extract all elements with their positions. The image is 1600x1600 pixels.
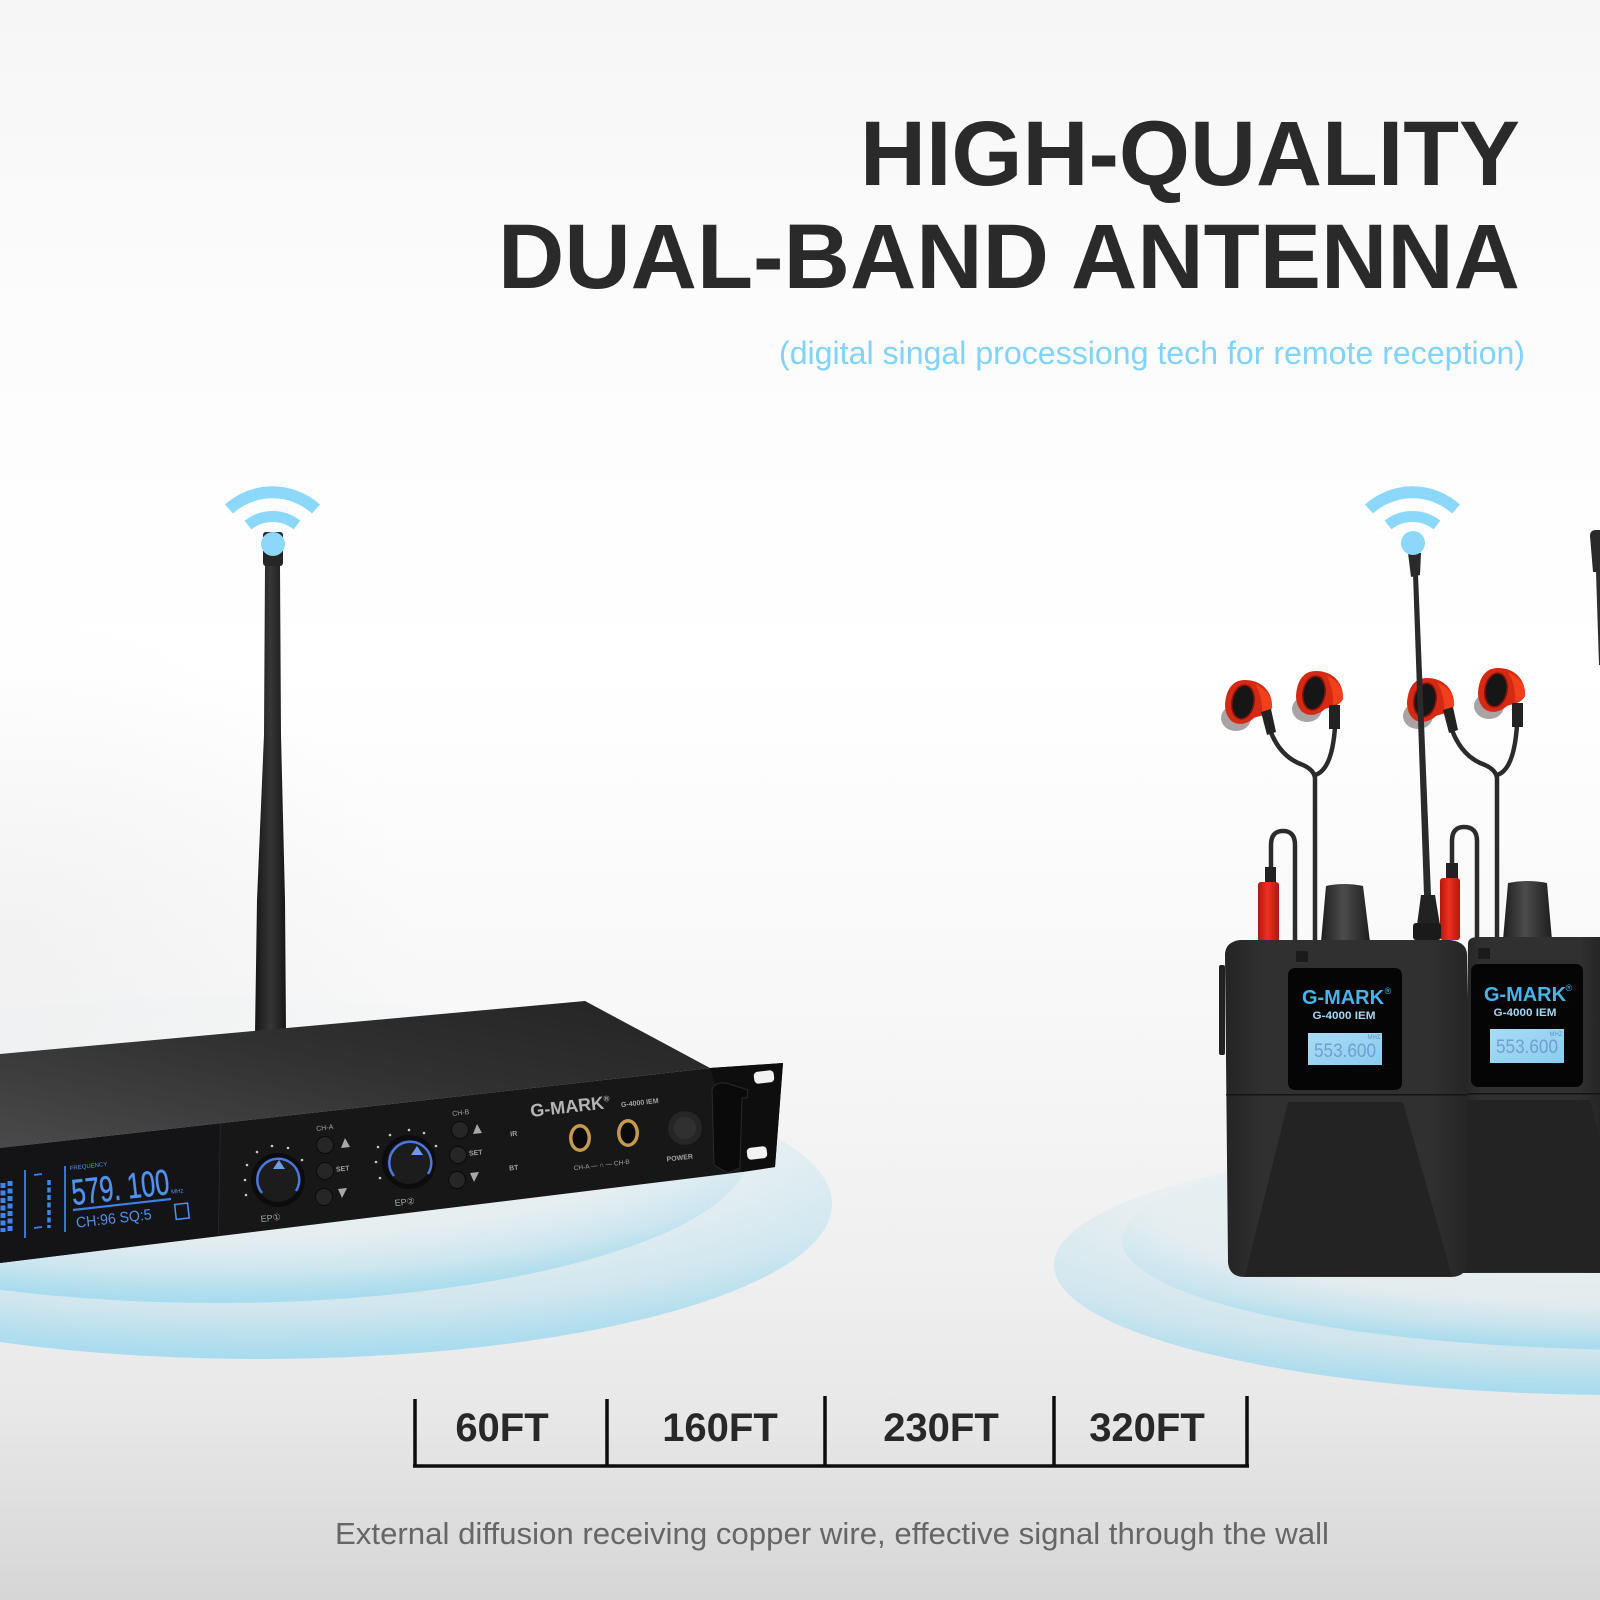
earbud 3 — [1403, 678, 1458, 733]
bodypack 2: G-4000 IEM — [1494, 1007, 1556, 1019]
bodypack 1 — [1219, 940, 1467, 1277]
signal waves: left — [0, 997, 832, 1359]
bodypack 1: ® — [1385, 986, 1392, 996]
power button — [668, 1111, 702, 1145]
level meter — [3, 1180, 49, 1232]
subtitle: (digital singal processiong tech for remote reception) — [779, 335, 1525, 371]
EP knob 2 — [375, 1129, 437, 1189]
distance scale — [413, 1396, 1249, 1466]
ear holes — [746, 1070, 775, 1160]
G-MARK logo: ® — [603, 1094, 610, 1104]
earbud 2 — [1292, 671, 1343, 729]
bodypack 1: MHZ — [1368, 1035, 1381, 1041]
title: DUAL-BAND ANTENNA — [498, 206, 1520, 308]
front panel labels: SET — [469, 1149, 484, 1158]
bodypack receivers — [1219, 863, 1600, 1277]
frequency readout: MHz — [171, 1188, 184, 1196]
rack ear — [710, 1063, 783, 1172]
title — [498, 103, 1520, 308]
distance labels: 320FT — [1089, 1406, 1205, 1450]
EP knob 1 — [244, 1145, 305, 1207]
front panel labels: EP② — [394, 1196, 415, 1208]
front panel labels — [260, 1098, 693, 1224]
front panel labels: BT — [509, 1164, 520, 1173]
in-ear monitors and cables — [1221, 668, 1525, 940]
front panel labels: POWER — [666, 1154, 693, 1163]
front panel labels: CH-A — [316, 1124, 334, 1133]
bodypack 2 — [1462, 937, 1600, 1273]
bodypack 2: 553.600 — [1496, 1037, 1558, 1058]
front panel labels: EP① — [260, 1212, 281, 1224]
bodypack 2: ® — [1566, 983, 1573, 993]
screen 1 — [1288, 968, 1402, 1090]
frequency readout: FREQUENCY — [70, 1162, 108, 1172]
frequency readout: 579. 100 — [69, 1161, 171, 1213]
front panel labels: IR — [510, 1131, 518, 1138]
distance labels: 60FT — [455, 1406, 549, 1450]
bodypack 2: G-MARK — [1484, 984, 1567, 1006]
screen 2 — [1471, 964, 1583, 1087]
wifi icon: right — [1369, 492, 1456, 555]
display lines — [25, 1166, 171, 1238]
cables — [1270, 725, 1517, 940]
lower trapezoid facet — [1245, 1102, 1452, 1276]
distance labels: 230FT — [883, 1406, 999, 1450]
scale lines — [413, 1396, 1249, 1466]
bodypack 1: 553.600 — [1314, 1041, 1376, 1062]
headphone jacks — [569, 1119, 639, 1152]
earbud 1 — [1221, 680, 1276, 735]
front panel labels: SET — [336, 1165, 351, 1174]
button arrows — [338, 1124, 482, 1198]
wifi icon: left — [229, 492, 316, 556]
volume knobs — [1321, 881, 1552, 942]
frequency readout: CH:96 SQ:5 — [75, 1206, 153, 1232]
handle — [712, 1083, 748, 1173]
G-MARK logo: G-MARK — [529, 1093, 605, 1121]
front panel labels: CH-B — [452, 1109, 470, 1118]
red plugs — [1258, 863, 1460, 942]
signal waves: right — [1054, 1130, 1600, 1395]
bodypack 1: G-MARK — [1302, 987, 1385, 1009]
distance labels: 160FT — [662, 1406, 778, 1450]
earbud 4 — [1474, 668, 1525, 727]
display divider — [218, 1124, 220, 1235]
bodypack 2: MHZ — [1550, 1032, 1563, 1038]
caption: External diffusion receiving copper wire, effective signal through the wall — [335, 1516, 1329, 1551]
bodypack 1: G-4000 IEM — [1312, 1010, 1376, 1022]
top face — [0, 1001, 710, 1148]
receiver rack unit — [0, 1001, 783, 1263]
left antenna — [255, 532, 286, 1034]
front panel labels: G-4000 IEM — [621, 1098, 659, 1109]
display panel — [0, 1124, 220, 1263]
center antenna — [1408, 553, 1441, 940]
far right antenna — [1590, 530, 1600, 665]
front panel labels: CH-A — ∩ — CH-B — [573, 1159, 630, 1172]
frequency readout — [69, 1153, 189, 1232]
distance labels — [455, 1406, 1205, 1450]
front panel — [0, 1063, 783, 1263]
title: HIGH-QUALITY — [860, 103, 1520, 205]
buttons — [316, 1122, 468, 1206]
